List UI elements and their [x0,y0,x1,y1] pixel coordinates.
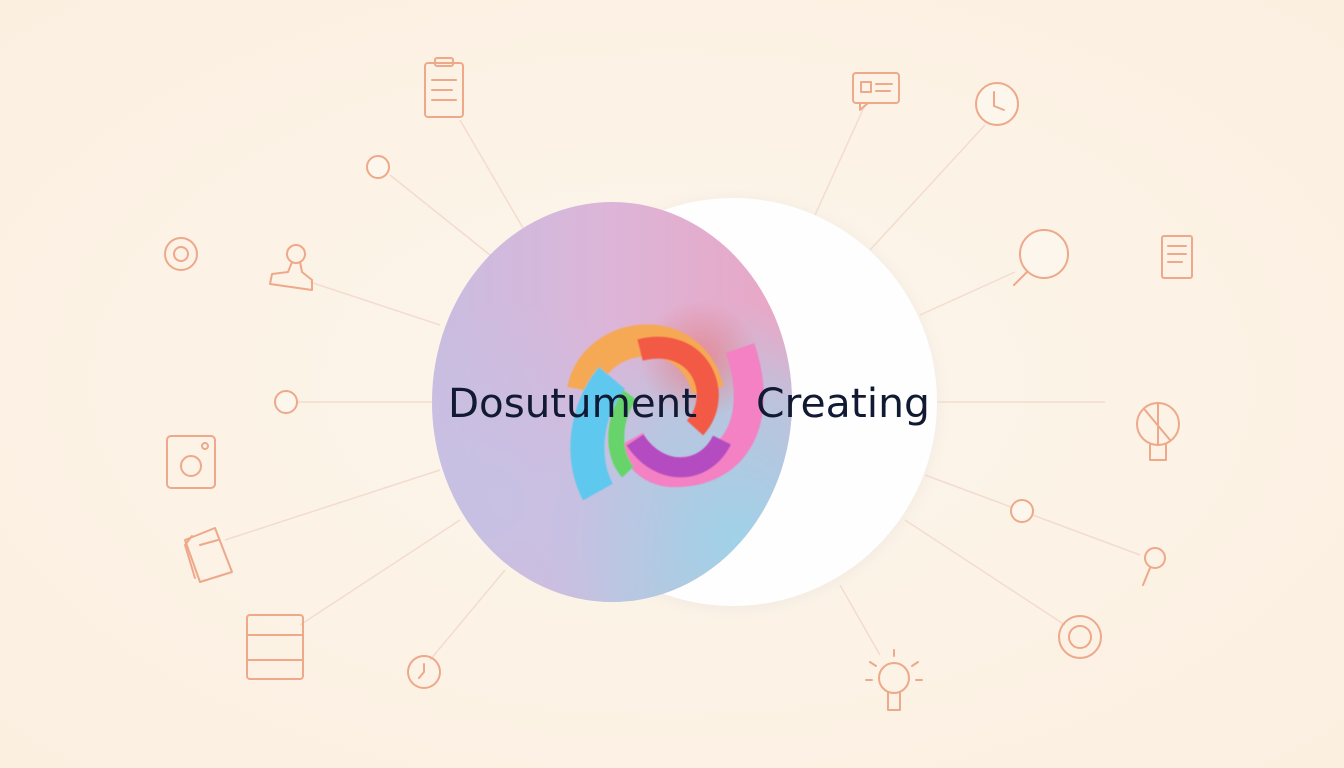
icon: chat [853,73,899,110]
icon: balloon bulb [1137,403,1179,460]
icon: ring [165,238,197,270]
icon: lifebuoy [1059,616,1101,658]
icon: pin [1143,548,1165,585]
label: Dosutument: Dosutument [448,381,697,427]
icon: node circles [275,156,1033,522]
icon: light bulb [866,650,922,710]
label: Creating: Creating [756,381,930,427]
icon: clock small [408,656,440,688]
icons [165,58,1192,710]
icon: box [247,615,303,679]
icon: camera [167,436,215,488]
white circle [527,198,939,610]
icon: document [1162,236,1192,278]
icon: notepad [185,528,232,582]
gradient circle [432,202,792,602]
connector lines [225,105,1140,660]
icon: clock [976,83,1018,125]
icon: clipboard [425,58,463,117]
swirl logo [583,340,749,492]
icon: magnifier [1014,230,1068,285]
icon: stamp [270,245,312,290]
